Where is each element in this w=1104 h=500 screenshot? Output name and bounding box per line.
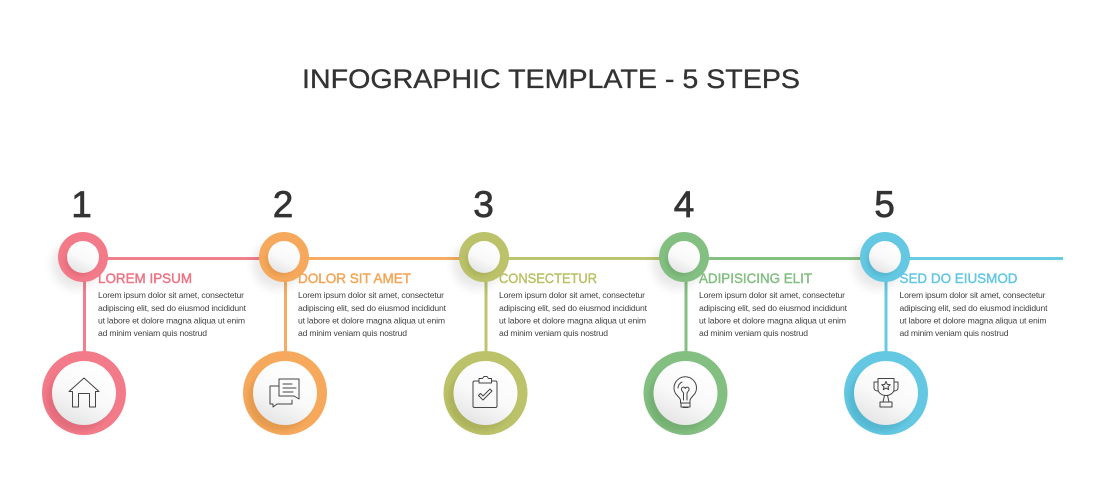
body text: ut labore et dolore magna aliqua ut enim xyxy=(900,316,1046,326)
icon: house xyxy=(69,378,99,407)
body text xyxy=(900,290,1048,338)
big ring xyxy=(844,351,928,435)
body text: Lorem ipsum dolor sit amet, consectetur xyxy=(900,290,1046,300)
body text: ad minim veniam quis nostrud xyxy=(900,328,1009,338)
big ring xyxy=(444,351,528,435)
small ring xyxy=(854,232,910,289)
body text: adipiscing elit, sed do eiusmod incididunt xyxy=(499,303,648,313)
body text: adipiscing elit, sed do eiusmod incididunt xyxy=(298,303,447,313)
small ring xyxy=(52,232,108,289)
big ring xyxy=(644,351,728,435)
number 2: 2 xyxy=(273,184,293,225)
step 3 xyxy=(444,184,662,435)
body text xyxy=(499,290,648,338)
big ring xyxy=(42,351,126,435)
number 4: 4 xyxy=(674,184,694,225)
icon: chat bubbles xyxy=(270,379,299,407)
body text xyxy=(699,290,848,338)
body text: ut labore et dolore magna aliqua ut enim xyxy=(298,316,445,326)
heading: DOLOR SIT AMET xyxy=(298,271,412,286)
small ring xyxy=(253,232,309,289)
body text: ut labore et dolore magna aliqua ut enim xyxy=(699,316,846,326)
number 1: 1 xyxy=(71,184,92,225)
body text: ut labore et dolore magna aliqua ut enim xyxy=(98,316,245,326)
body text xyxy=(298,290,447,338)
icon: trophy xyxy=(874,378,898,407)
number 3: 3 xyxy=(473,184,494,225)
body text: Lorem ipsum dolor sit amet, consectetur xyxy=(298,290,444,300)
heading: CONSECTETUR xyxy=(499,271,597,286)
heading: SED DO EIUSMOD xyxy=(900,271,1018,286)
icon: light bulb xyxy=(674,377,696,408)
body text: ut labore et dolore magna aliqua ut enim xyxy=(499,316,646,326)
body text: ad minim veniam quis nostrud xyxy=(298,328,407,338)
connector lines xyxy=(83,257,261,354)
body text: ad minim veniam quis nostrud xyxy=(499,328,608,338)
icon: clipboard check xyxy=(473,376,497,408)
heading: LOREM IPSUM xyxy=(98,271,192,286)
connector lines xyxy=(884,257,1063,354)
connector lines xyxy=(284,257,462,354)
step 5 xyxy=(844,184,1063,435)
body text: ad minim veniam quis nostrud xyxy=(699,328,808,338)
title: INFOGRAPHIC TEMPLATE - 5 STEPS xyxy=(302,64,800,94)
body text: ad minim veniam quis nostrud xyxy=(98,328,207,338)
big ring xyxy=(243,351,327,435)
number 5: 5 xyxy=(874,184,895,225)
body text: Lorem ipsum dolor sit amet, consectetur xyxy=(699,290,845,300)
body text xyxy=(98,290,247,338)
step 2 xyxy=(243,184,462,435)
small ring xyxy=(653,232,709,289)
body text: adipiscing elit, sed do eiusmod incididunt xyxy=(98,303,247,313)
small ring xyxy=(453,232,509,289)
connector lines xyxy=(484,257,662,354)
step 4 xyxy=(644,184,862,435)
connector lines xyxy=(684,257,862,354)
body text: adipiscing elit, sed do eiusmod incididunt xyxy=(699,303,848,313)
body text: Lorem ipsum dolor sit amet, consectetur xyxy=(98,290,244,300)
step 1 xyxy=(42,184,261,435)
body text: adipiscing elit, sed do eiusmod incididunt xyxy=(900,303,1048,313)
body text: Lorem ipsum dolor sit amet, consectetur xyxy=(499,290,645,300)
heading: ADIPISICING ELIT xyxy=(699,271,813,286)
